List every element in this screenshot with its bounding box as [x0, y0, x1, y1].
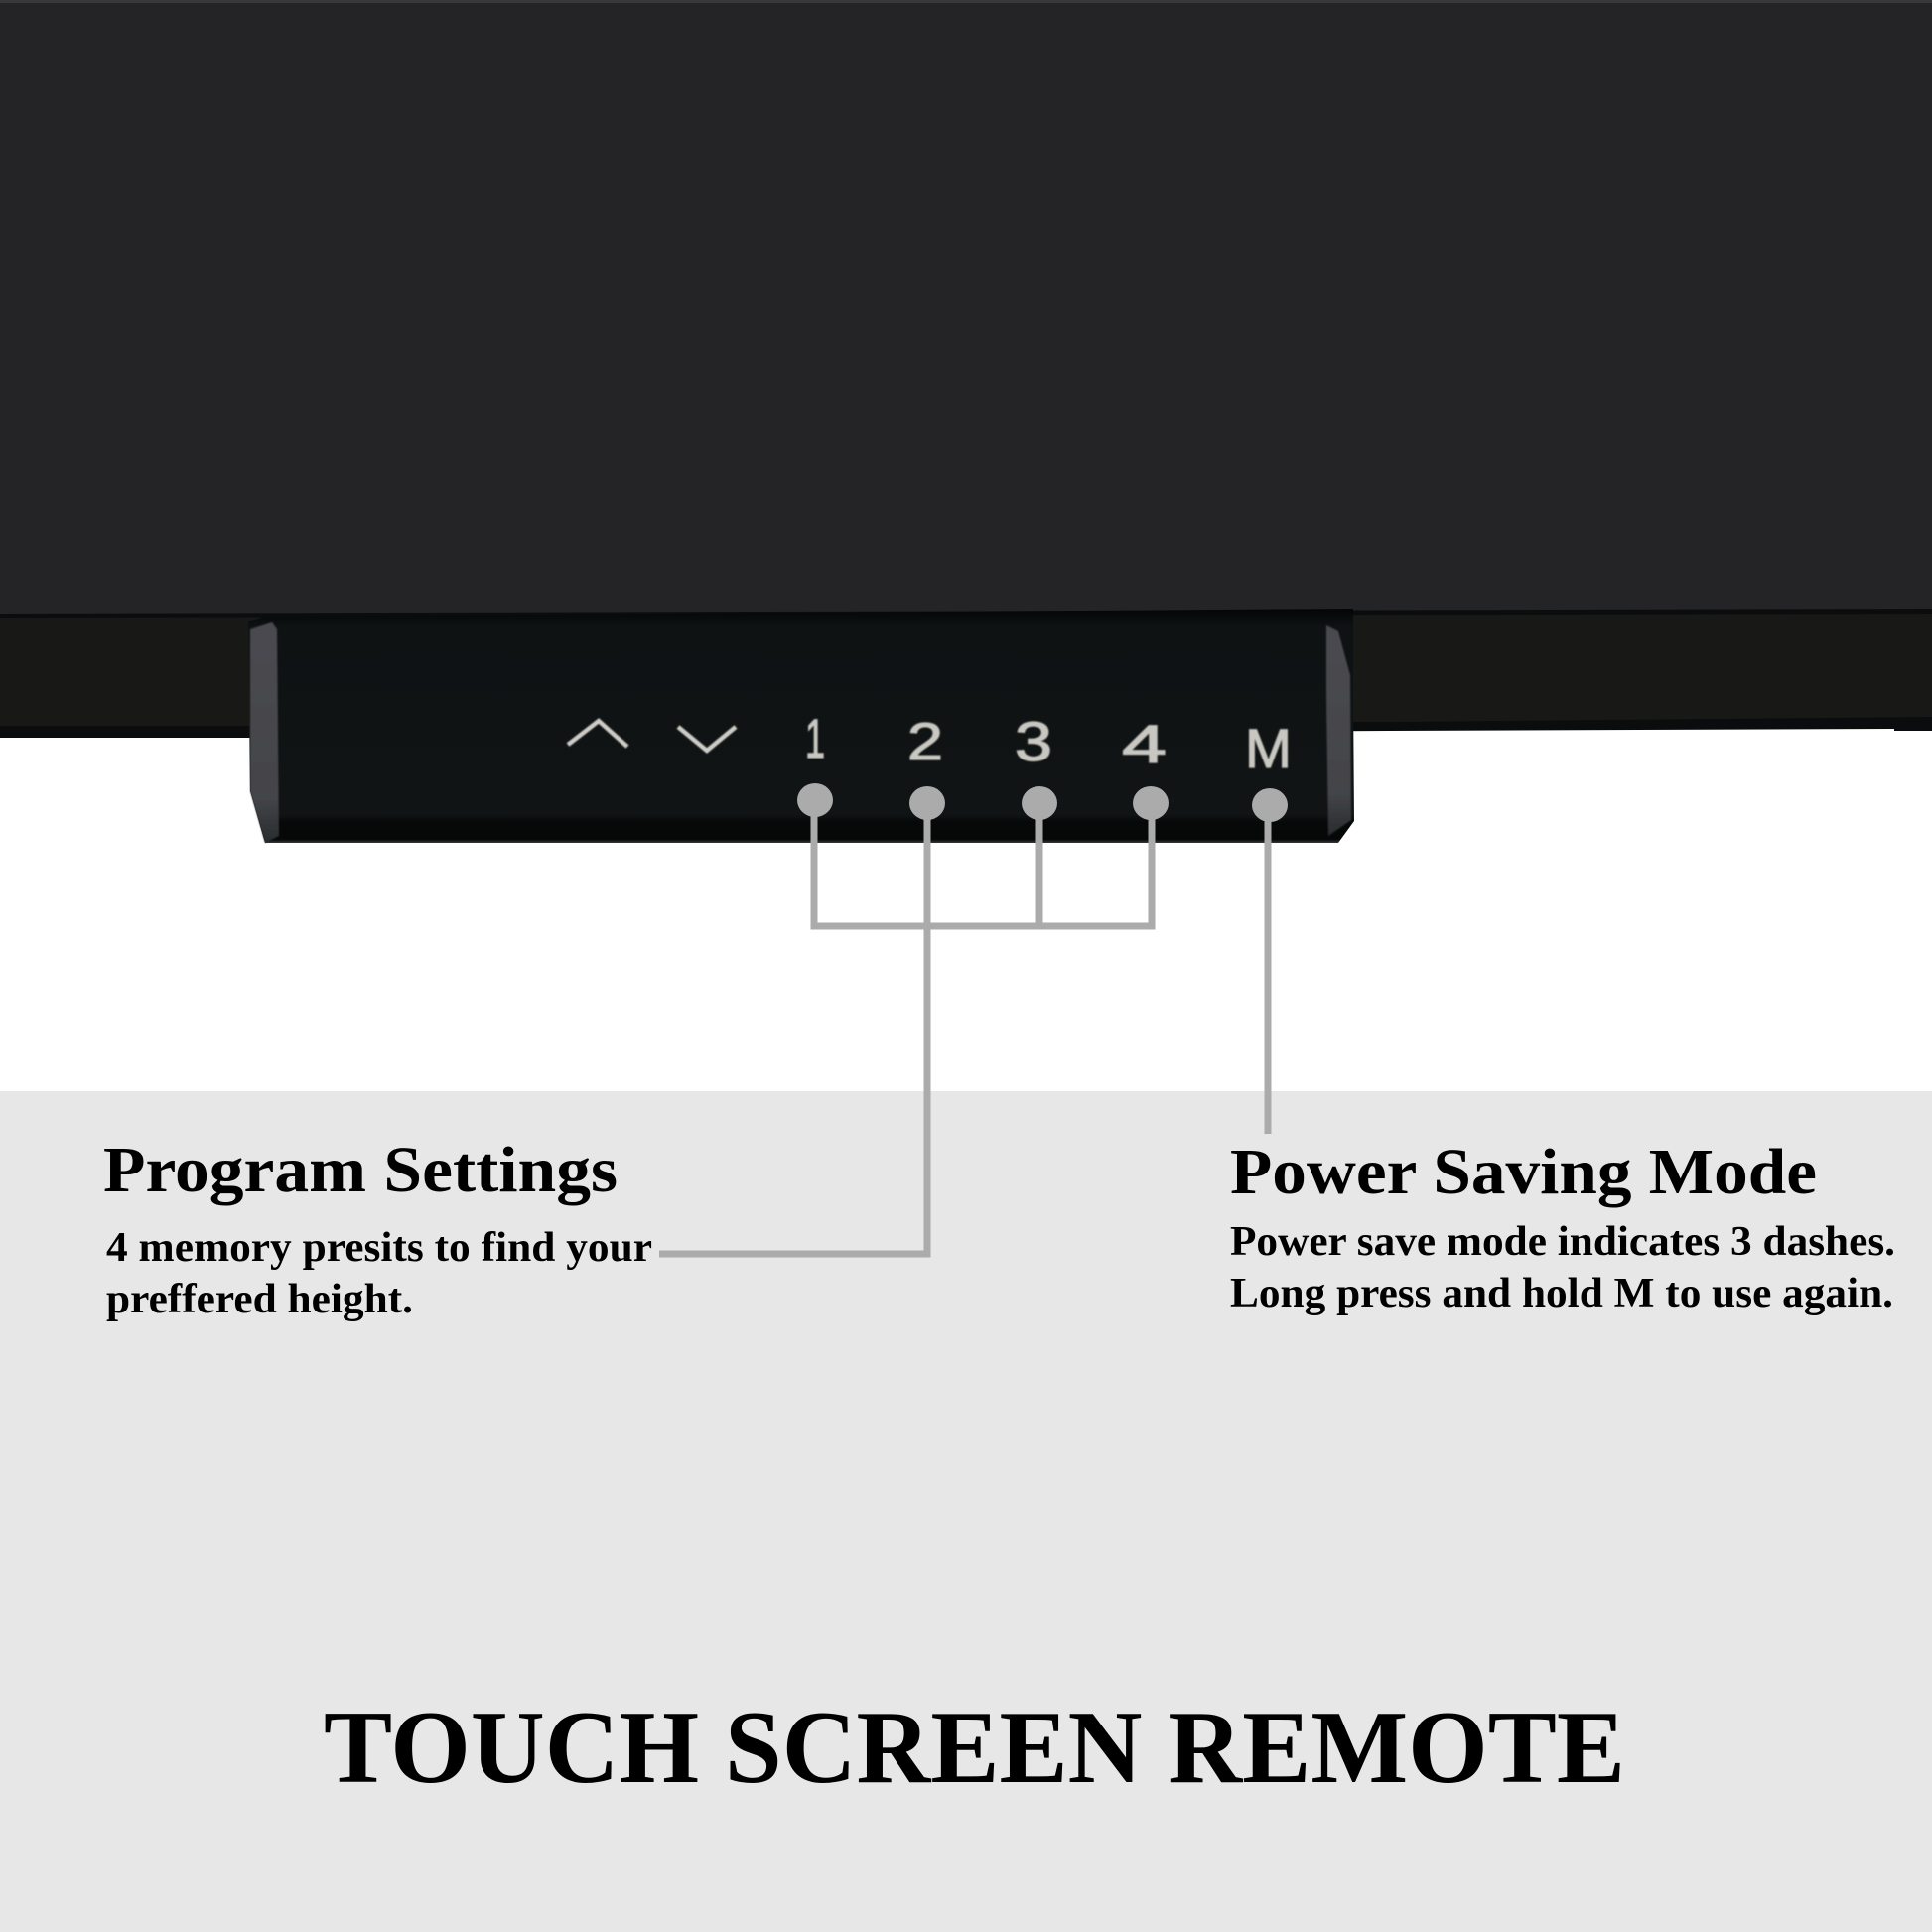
callout connector: program settings	[659, 783, 1169, 1254]
callout connector: power saving mode	[1252, 788, 1288, 1134]
down arrow button	[678, 727, 736, 751]
panel: gray information area	[0, 1091, 1932, 1932]
up arrow button	[568, 721, 627, 747]
button 2: 2	[907, 713, 943, 771]
remote right side bevel	[1326, 625, 1351, 836]
heading: power saving mode: Power Saving Mode	[1230, 1136, 1817, 1208]
description: power saving mode: Long press and hold M to use again.	[1230, 1271, 1893, 1316]
button 3: 3	[1015, 710, 1052, 772]
remote left side bevel	[250, 622, 279, 843]
description: power saving mode: Power save mode indicates 3 dashes.	[1230, 1219, 1895, 1265]
description: program settings: 4 memory presits to find your	[106, 1225, 652, 1271]
text block: program settings	[103, 1134, 652, 1322]
title: TOUCH SCREEN REMOTE	[324, 1689, 1625, 1805]
desk top surface	[0, 0, 1932, 614]
description: power saving mode	[1230, 1219, 1895, 1316]
description: program settings: preffered height.	[106, 1277, 413, 1322]
desk underside bar	[0, 606, 1932, 738]
text block: power saving mode	[1230, 1136, 1895, 1316]
button 1: 1	[805, 707, 825, 769]
button M: M	[1245, 717, 1292, 779]
button 4: 4	[1122, 715, 1167, 774]
remote control unit	[248, 609, 1354, 843]
description: program settings	[106, 1225, 652, 1322]
heading: program settings: Program Settings	[103, 1134, 618, 1206]
